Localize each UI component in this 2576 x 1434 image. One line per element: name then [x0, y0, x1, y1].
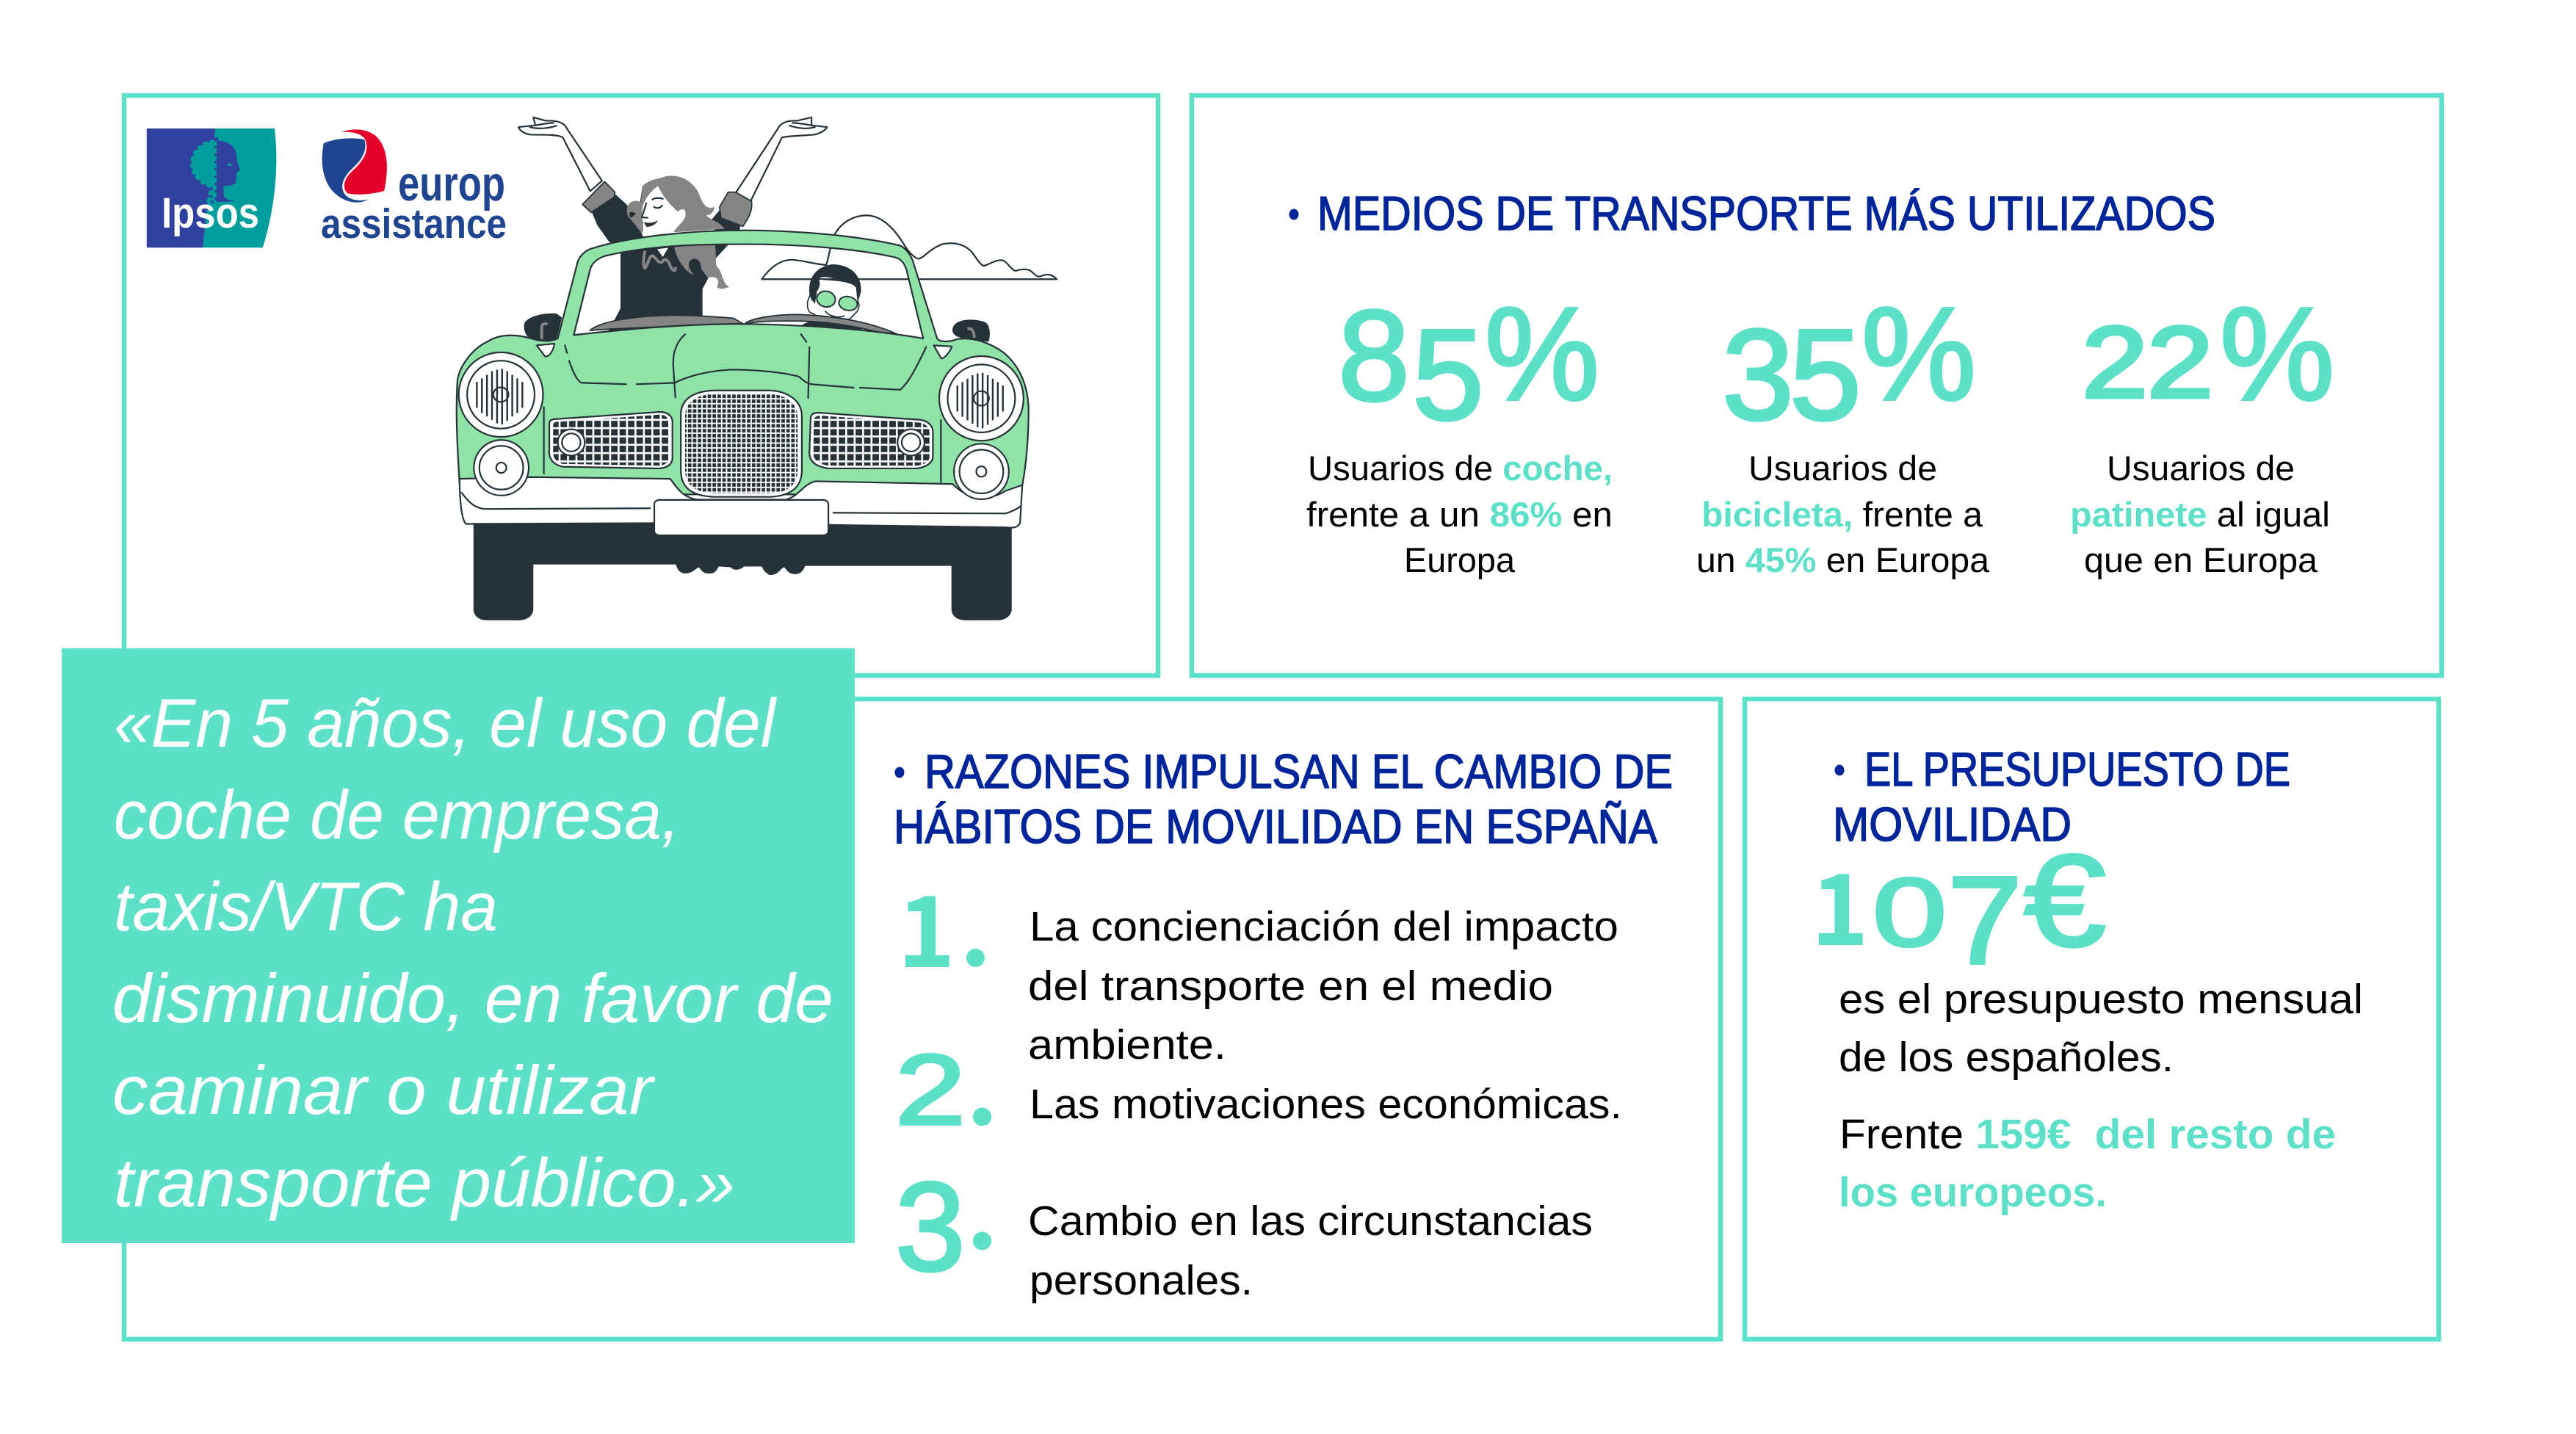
stat: 107 euros: 7 [1947, 851, 2022, 991]
logo: Europ Assistance [321, 129, 507, 247]
description: presupuesto mensual: es el presupuesto mensual [1839, 977, 2363, 1023]
caption: bicicleta [1696, 449, 1990, 579]
stat: 35% [1722, 280, 1976, 447]
heading: razones: RAZONES IMPULSAN EL CAMBIO DE [925, 745, 1673, 798]
illustration: convertible car [457, 231, 1029, 620]
reason 3 [1028, 1198, 1593, 1304]
panel: razones [124, 699, 1721, 1339]
reason 3: personales. [1030, 1258, 1253, 1304]
callout: quote box: coche de empresa, [114, 776, 680, 853]
logo: Ipsos: Ipsos [162, 189, 259, 237]
caption: bicicleta: un 45% en Europa [1696, 540, 1990, 579]
heading: razones [894, 745, 1673, 853]
caption: patinete: que en Europa [2084, 540, 2318, 579]
centre grille [681, 391, 802, 497]
heading: presupuesto: MOVILIDAD [1833, 797, 2072, 851]
comparison: resto de europeos: Frente 159€ del resto de [1839, 1112, 2336, 1158]
caption: coche: Europa [1404, 540, 1516, 579]
callout: quote box [62, 648, 855, 1243]
left headlight [459, 352, 543, 437]
stat: 85%: 8 [1338, 284, 1410, 428]
stat: 35%: % [1862, 280, 1976, 428]
callout: quote box: transporte público.» [114, 1144, 735, 1221]
heading: presupuesto: EL PRESUPUESTO DE [1864, 742, 2290, 796]
right side grille [809, 413, 933, 468]
illustration: cloud [761, 215, 1057, 279]
callout: quote box: caminar o utilizar [112, 1051, 656, 1129]
callout: quote box: disminuido, en favor de [112, 960, 833, 1037]
reason 1: ambiente. [1028, 1022, 1226, 1068]
car chassis and tyres [474, 521, 1012, 620]
stat: 85%: 5 [1412, 303, 1484, 447]
fog lamps [474, 440, 1009, 499]
number 2 [895, 1034, 991, 1145]
caption: coche: frente a un 86% en [1306, 495, 1613, 534]
hood crease lines [544, 334, 941, 482]
logo: Europ Assistance: assistance [321, 200, 507, 247]
number plate [654, 500, 828, 535]
caption: patinete [2070, 449, 2330, 579]
stat: 35%: 3 [1722, 303, 1794, 447]
illustration: woman with raised arms [518, 117, 827, 332]
callout: quote box: «En 5 años, el uso del [114, 684, 777, 761]
logo: Europ Assistance: europ [398, 156, 505, 211]
indicators [537, 344, 952, 358]
stat: 107 euros: 1 [1811, 831, 1869, 974]
reason 1: del transporte en el medio [1028, 963, 1553, 1010]
stat: 22%: % [2220, 280, 2334, 428]
description: presupuesto mensual: de los españoles. [1839, 1035, 2174, 1081]
callout: quote box: taxis/VTC ha [114, 868, 498, 945]
caption: coche [1306, 449, 1613, 579]
illustration: driver with sunglasses [803, 264, 864, 331]
heading: presupuesto [1833, 742, 2290, 851]
reason 1 [1028, 904, 1618, 1068]
caption: bicicleta: Usuarios de [1748, 449, 1937, 488]
number 1: 1 [897, 853, 955, 996]
comparison: resto de europeos [1839, 1112, 2336, 1216]
number 2: 2 [895, 1034, 966, 1145]
stat: 107 euros: 0 [1873, 858, 1947, 966]
stat: 22%: 2 [2147, 306, 2213, 419]
number 1 [897, 853, 985, 996]
panel: medios de transporte [1192, 95, 2442, 676]
stat: 22% [2082, 280, 2334, 428]
comparison: resto de europeos: los europeos. [1839, 1170, 2107, 1216]
wing mirrors [524, 314, 990, 342]
panel: presupuesto [1745, 699, 2439, 1339]
left side grille [549, 412, 673, 468]
stat: 85% [1338, 280, 1599, 447]
heading: razones: HÁBITOS DE MOVILIDAD EN ESPAÑA [894, 800, 1658, 853]
description: presupuesto mensual [1839, 977, 2363, 1081]
stat: 85%: % [1485, 280, 1599, 428]
illustration: dashboard and steering wheel [590, 314, 897, 334]
stat: 22%: 2 [2082, 306, 2148, 419]
panel: car illustration frame [124, 95, 1158, 676]
heading: medios de transporte: MEDIOS DE TRANSPORTE MÁS UTILIZADOS [1317, 187, 2215, 240]
stat: 35%: 5 [1790, 303, 1862, 447]
caption: bicicleta: bicicleta, frente a [1701, 495, 1983, 534]
bumper [460, 477, 1022, 528]
caption: patinete: patinete al igual [2070, 495, 2330, 534]
reason 1: La concienciación del impacto [1030, 904, 1618, 950]
number 3: 3 [895, 1156, 966, 1297]
caption: coche: Usuarios de coche, [1308, 449, 1613, 488]
reason 2: Las motivaciones económicas. [1030, 1082, 1622, 1128]
logo: Ipsos [147, 128, 276, 247]
car body and windshield frame [457, 231, 1029, 498]
stat: 107 euros: € [2024, 828, 2106, 974]
reason 3: Cambio en las circunstancias [1028, 1198, 1593, 1245]
stat: 107 euros [1811, 828, 2106, 991]
right headlight [939, 356, 1024, 441]
caption: patinete: Usuarios de [2107, 449, 2295, 488]
